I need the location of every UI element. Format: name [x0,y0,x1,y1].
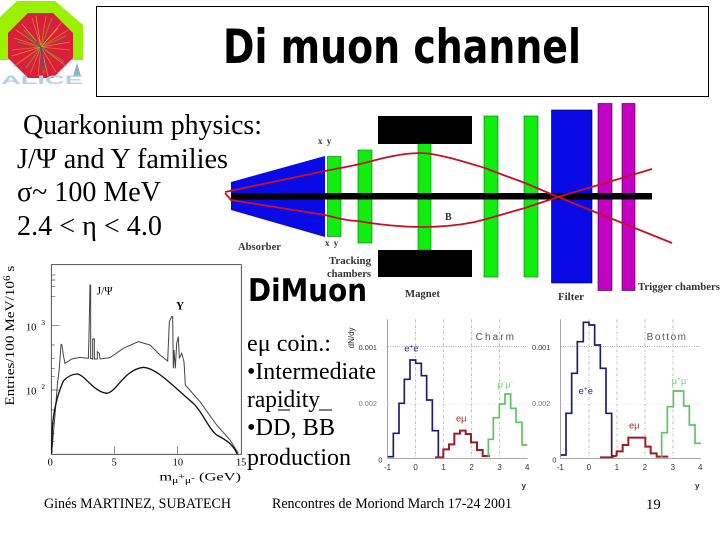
upper curve: signal plus background [52,285,238,453]
lower curve: background [52,367,237,454]
text block: quarkonium physics [17,110,262,242]
panel: bottom: 0 [587,463,592,472]
text block: e-mu coincidence: rapidity [247,387,320,413]
footer: page number: 19 [646,497,661,513]
magnet [378,116,472,277]
axis labels: 5 [112,458,117,469]
panel: charm: Charm [476,332,514,343]
diagram: dimuon spectrometer [225,104,720,303]
axis labels: - [191,473,195,482]
panel: bottom: 3 [671,463,676,472]
panel: charm: μ [498,379,503,389]
footer: conference: Rencontres de Moriond March 17-24 2001 [272,496,512,512]
axis labels: μ [185,476,191,485]
panel: charm: 0 [378,456,382,465]
panel: charm: 2 [469,463,474,472]
panel: charm: - [511,379,513,386]
panel: charm: μ [505,379,511,389]
muon tracks [225,153,672,243]
panel: charm: 0 [413,463,418,472]
title: Di muon channel [223,20,581,75]
panel: bottom: μ [672,376,677,386]
detector labels: Tracking [329,256,371,267]
detector labels: chambers [327,269,371,280]
panel: bottom: 0.002 [532,399,550,408]
detector labels: x y [318,136,332,146]
detector labels: Filter [558,292,585,303]
panel: charm: eμ [456,413,467,423]
panel: bottom [532,319,703,490]
tracking chambers [328,116,538,277]
panel: charm: e [413,343,419,353]
text block: e-mu coincidence: production [247,445,351,471]
panel: bottom: 1 [615,463,620,472]
panel: bottom: e [579,386,584,396]
filter [552,110,592,283]
y axis title: dN/dy [347,327,356,348]
panel: bottom: 0.001 [532,343,550,352]
panel: charm [359,319,530,490]
axis labels [26,285,246,485]
detector labels: Absorber [238,242,282,253]
axis labels: m [159,471,168,483]
text block: e-mu coincidence: •Intermediate [247,359,376,385]
detector labels [238,136,720,303]
panel: bottom: 0 [552,456,556,465]
footer: author: Ginés MARTINEZ, SUBATECH [44,496,231,512]
panel: bottom: Bottom [647,332,686,343]
panel: bottom: 4 [698,463,703,472]
text block: e-mu coincidence: •DD, BB [247,415,335,441]
axis labels: 0 [48,458,53,469]
panel: charm: y [522,481,527,490]
detector labels: Trigger chambers [638,282,720,293]
axis labels: μ [172,476,178,485]
panel: bottom: eμ [629,421,640,431]
chart: dimuon mass spectrum [3,265,246,485]
panel: charm: -1 [384,463,392,472]
panel: charm: 1 [441,463,446,472]
panel: bottom: μ [681,376,686,386]
icon: ALICE logo: ALICE [1,73,83,87]
panel: charm: 3 [497,463,502,472]
heading: DiMuon: DiMuon [248,273,367,309]
text block: e-mu coincidence [247,331,376,471]
panel: bottom: -1 [557,463,564,472]
panel: bottom: y [695,481,700,490]
text block: quarkonium physics: J/Ψ and Y families [17,144,228,175]
plot frame [51,265,241,454]
axis labels: J/Ψ [97,285,113,297]
panel: bottom: + [584,386,588,393]
panel: bottom: + [677,376,681,383]
axis labels: 10 [173,458,183,469]
axis labels: 3 [41,318,45,327]
absorber [231,156,325,237]
text block: quarkonium physics: σ~ 100 MeV [17,177,161,208]
y axis title: Entries/100 MeV/10 [3,302,17,406]
icon: ALICE logo [0,1,83,87]
panel: charm: - [503,379,505,386]
panel: charm: 0.001 [359,343,377,352]
axis labels: 15 [236,458,246,469]
y axis title: s [3,266,17,275]
axis ticks [51,275,178,454]
detector labels: B [445,212,452,223]
panel: charm: e [404,343,410,353]
axis labels: 2 [41,382,45,391]
text block: quarkonium physics: 2.4 < η < 4.0 [17,211,162,242]
title [96,6,708,96]
panel: bottom: e [588,386,593,396]
axis labels: + [178,472,186,481]
beam pipe [231,193,652,200]
y axis title: 6 [3,275,13,281]
axis labels: 10 [26,323,36,334]
panel: charm: + [410,343,414,350]
detector labels: x y [325,238,339,248]
detector labels: Magnet [405,289,441,300]
axis labels: 10 [26,386,36,397]
text block: quarkonium physics: Quarkonium physics: [23,110,262,141]
axis labels: (GeV) [198,471,227,483]
panel: charm: 0.002 [359,399,377,408]
trigger chambers [598,104,635,290]
panel: charm: 4 [525,463,530,472]
panel: bottom: 2 [643,463,648,472]
chart: rapidity distributions [347,319,703,490]
axis labels: Υ [176,300,184,312]
text block: e-mu coincidence: eμ coin.: [247,331,331,357]
panel: bottom: - [686,376,689,383]
